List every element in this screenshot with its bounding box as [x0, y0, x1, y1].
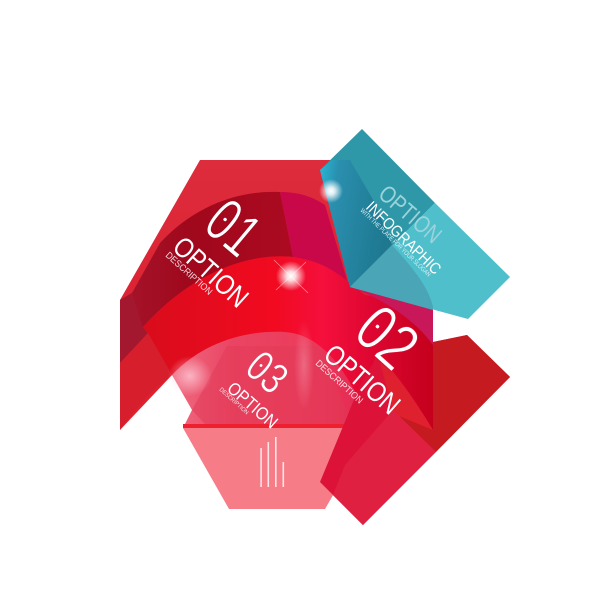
dark arc band: [120, 192, 293, 345]
panel: dome: [172, 332, 372, 428]
option 03 number: 03: [236, 342, 297, 403]
crimson lower facet: [333, 410, 436, 525]
divider stripe: [183, 424, 345, 428]
option 03 description: DESCRIPTION: [218, 387, 249, 416]
teal overlap dark: [320, 160, 392, 287]
teal upper: [320, 129, 435, 287]
option 02 number: 02: [342, 290, 434, 384]
left dark facet: [120, 293, 148, 363]
option 03 label: OPTION: [223, 378, 282, 432]
option 01 description: DESCRIPTION: [163, 250, 214, 298]
teal lower: [350, 203, 510, 319]
option 01 label: OPTION: [167, 230, 255, 314]
dome beam: [294, 320, 314, 410]
upper right magenta corner: [350, 287, 433, 345]
panel: teal card: [320, 129, 510, 319]
lower left facet: [120, 333, 172, 430]
option 02 description: DESCRIPTION: [313, 358, 365, 406]
top band: [120, 160, 433, 430]
panel: main red shape: [120, 160, 433, 430]
teal overlap lower: [350, 245, 433, 310]
option 02 label: OPTION: [318, 338, 406, 421]
magenta facet: [280, 192, 349, 287]
teal heading: option: OPTION: [373, 180, 447, 249]
arrow panel: crimson shape behind: [320, 335, 510, 525]
bar icon: [260, 437, 284, 487]
panel: hexagon base: [183, 428, 372, 509]
option 01 number: 01: [192, 186, 274, 270]
sparkle centre: [274, 260, 308, 293]
teal heading: infographic: INFOGRAPHIC: [362, 199, 444, 278]
crimson overlay on hexagon: [320, 355, 393, 525]
dome flare: [168, 356, 212, 396]
sparkle right: [319, 179, 343, 203]
dome inner facet: [192, 346, 352, 424]
bright red wave: [143, 256, 433, 430]
teal slogan: WITH THE PLACE FOR YOUR SLOGAN: [359, 207, 432, 279]
